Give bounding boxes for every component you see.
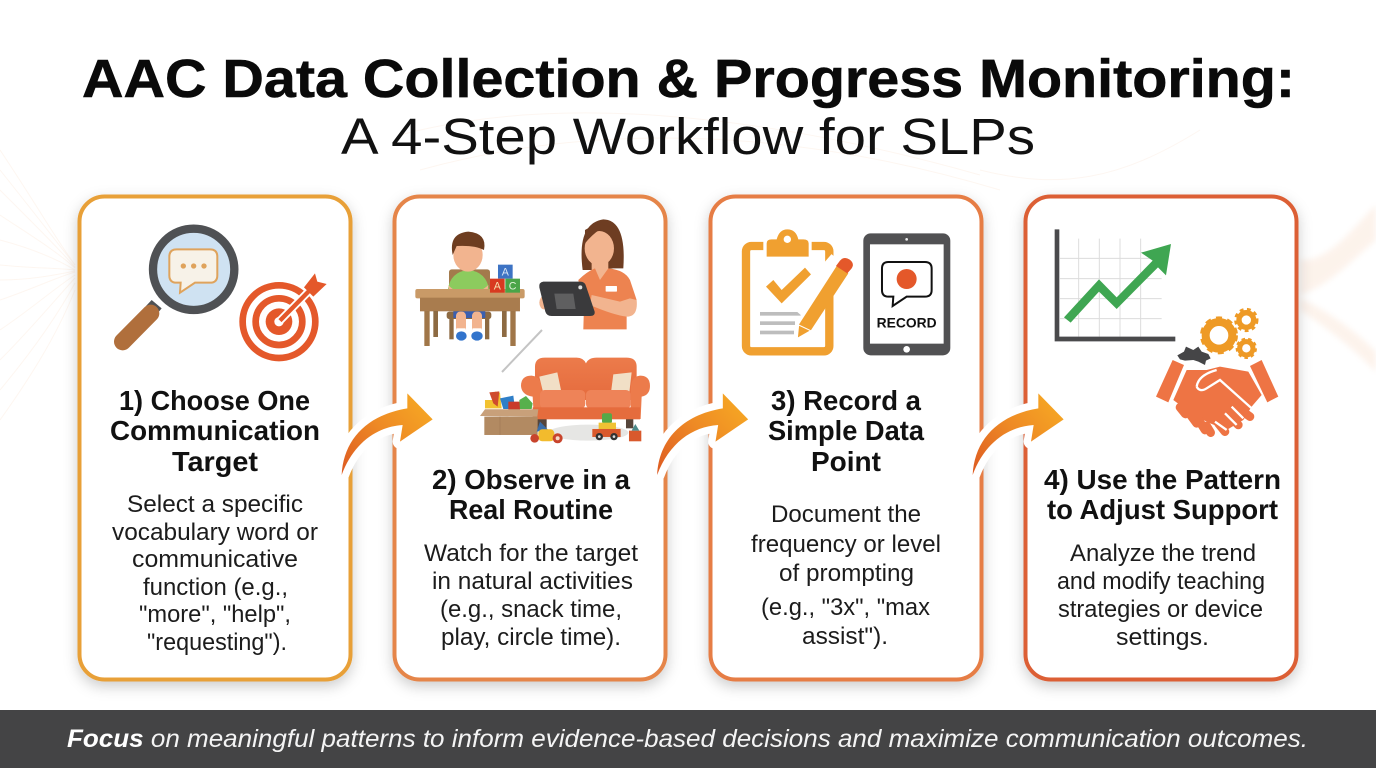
text: step 1 description: function (e.g.,	[143, 574, 288, 601]
icon: clipboard with check and pencil	[746, 229, 853, 351]
title: A 4-Step Workflow for SLPs	[341, 108, 1035, 165]
arrow: step 2 to 3	[657, 393, 748, 475]
panel: step 2	[394, 196, 666, 680]
text: step 4 description: and modify teaching	[1057, 568, 1265, 595]
text: step 4 description: Analyze the trend	[1070, 540, 1256, 567]
icon: clinician with tablet	[539, 219, 637, 329]
heading: step 4: to Adjust Support	[1047, 494, 1278, 525]
text: step 1 description: communicative	[132, 546, 298, 573]
icon: child at desk with blocks	[415, 232, 525, 346]
icon: target with arrow	[243, 273, 327, 358]
text: step 1 description: "requesting").	[147, 629, 287, 656]
text: step 4 description	[1057, 540, 1265, 651]
text: step 1 description: vocabulary word or	[112, 519, 318, 546]
heading: step 3	[768, 385, 924, 477]
text: step 3 description: (e.g., "3x", "max	[761, 594, 930, 621]
text: step 2 description	[424, 540, 638, 651]
text: step 4 description: settings.	[1116, 624, 1209, 651]
text: step 2 description: play, circle time).	[441, 624, 621, 651]
title: AAC Data Collection & Progress Monitoring:	[82, 49, 1295, 109]
heading: step 3: Point	[811, 446, 881, 477]
text: step 4 description: strategies or device	[1058, 596, 1263, 623]
heading: step 2: Real Routine	[449, 494, 613, 525]
text: step 1 description: Select a specific	[127, 491, 303, 518]
text: step 1 description	[112, 491, 318, 656]
panel: step 1	[80, 196, 350, 680]
footer banner: Focus on meaningful patterns to inform evidence-based decisions and maximize communication outcomes.	[67, 725, 1308, 753]
text: step 2 description: Watch for the target	[424, 540, 638, 567]
icon: sofa with toys	[480, 358, 650, 443]
icon: child at desk with blocks: A	[494, 281, 502, 293]
footer banner	[0, 710, 1376, 768]
heading: step 1: Communication	[110, 415, 320, 446]
icon: child at desk with blocks: C	[509, 281, 517, 293]
title	[82, 49, 1295, 165]
text: step 3 description: frequency or level	[751, 531, 941, 558]
text: step 1 description: "more", "help",	[139, 601, 291, 628]
arrow: step 3 to 4	[973, 393, 1064, 475]
chart: upward trend line	[1057, 229, 1175, 339]
icon: tablet with record button	[863, 233, 950, 355]
heading: step 3: 3) Record a	[771, 385, 921, 416]
text: step 3 description	[751, 501, 941, 650]
text: step 3 description: Document the	[771, 501, 921, 528]
icon: child at desk with blocks: A	[502, 267, 510, 279]
text: step 2 description: in natural activities	[432, 568, 633, 595]
heading: step 2	[432, 464, 630, 525]
divider line between scenes	[502, 330, 542, 372]
icon: tablet with record button: RECORD	[877, 315, 937, 330]
icon: gears and handshake	[1156, 310, 1278, 433]
arrow: step 1 to 2	[342, 393, 433, 475]
panel: step 4	[1026, 196, 1296, 680]
icon: magnifying glass with speech bubble	[123, 229, 234, 342]
heading: step 4: 4) Use the Pattern	[1044, 464, 1281, 495]
heading: step 1: 1) Choose One	[119, 385, 310, 416]
text: step 3 description: assist").	[802, 623, 888, 650]
text: step 3 description: of prompting	[779, 560, 914, 587]
text: step 2 description: (e.g., snack time,	[440, 596, 622, 623]
heading: step 2: 2) Observe in a	[432, 464, 630, 495]
panel: step 3	[710, 196, 982, 680]
heading: step 1	[110, 385, 320, 477]
heading: step 3: Simple Data	[768, 415, 924, 446]
heading: step 4	[1044, 464, 1281, 525]
heading: step 1: Target	[172, 446, 258, 477]
